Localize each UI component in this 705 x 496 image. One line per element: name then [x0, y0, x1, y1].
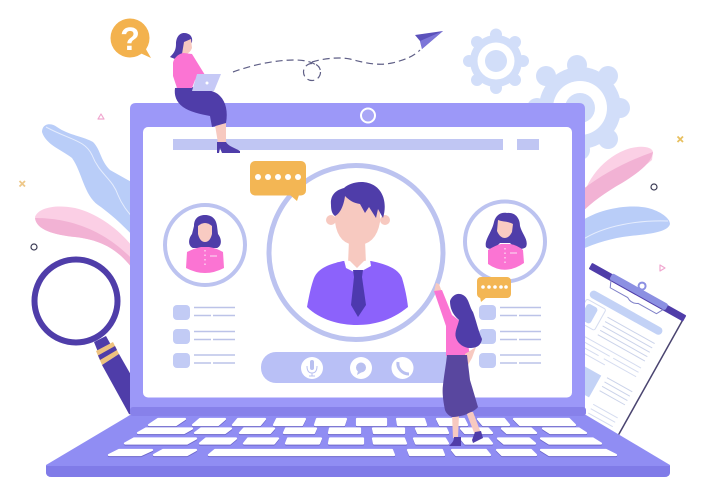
icon: small gear [463, 28, 529, 94]
question mark speech bubble: ? [120, 21, 140, 57]
lid hinge bar [130, 407, 586, 416]
standing woman's legs [452, 412, 481, 438]
laptop screen [143, 127, 572, 398]
sitting woman's face [182, 39, 192, 54]
woman standing with raised arm [434, 283, 483, 446]
man's shirt [307, 261, 408, 325]
large chat bubble [250, 161, 306, 201]
icon: message [350, 357, 372, 379]
keyboard [109, 419, 616, 455]
clipboard with document [503, 256, 690, 474]
laptop base lip [46, 466, 670, 477]
standing woman's skirt [443, 355, 478, 417]
laptop [46, 103, 670, 477]
right pink leaf [580, 147, 653, 214]
left pink leaf [35, 206, 135, 272]
standing woman's shoes [449, 431, 483, 446]
standing woman's top [434, 290, 470, 356]
sitting woman's shoe [217, 142, 240, 153]
icon: paper plane [415, 31, 443, 49]
small chat bubble [477, 277, 511, 302]
icon: phone [392, 357, 414, 379]
magnifying glass [34, 260, 135, 416]
man's face [335, 195, 380, 245]
man's neck [348, 240, 366, 272]
sitting woman's sweater [173, 53, 205, 88]
right contact list [479, 305, 541, 368]
right profile avatar [465, 202, 545, 282]
main profile avatar [269, 166, 443, 340]
sitting woman's skirt [175, 87, 227, 127]
sitting woman's hair [170, 33, 192, 59]
standing woman's hand [434, 283, 442, 292]
screen top bars [173, 139, 539, 150]
webcam [361, 108, 375, 122]
left profile avatar [165, 205, 245, 285]
dashed flight path [233, 50, 420, 80]
right blue leaf [580, 207, 670, 250]
icon: large gear [527, 55, 630, 160]
icon: microphone [301, 357, 323, 379]
call controls pill [261, 352, 461, 383]
man's tie [351, 270, 366, 317]
man's collar [344, 260, 371, 272]
woman sitting with laptop [170, 33, 240, 153]
standing woman's hair [450, 294, 482, 348]
man's ears [326, 215, 390, 225]
laptop lid [130, 103, 585, 410]
standing woman's forearm [465, 347, 476, 365]
sitting woman's leg [215, 123, 226, 143]
decorative markers [20, 114, 683, 271]
left blue leaf [42, 124, 135, 238]
left contact list [173, 305, 235, 368]
question mark speech bubble [110, 18, 151, 58]
man's hair [331, 182, 385, 218]
laptop deck [46, 415, 670, 477]
sitting woman's laptop [192, 74, 221, 91]
